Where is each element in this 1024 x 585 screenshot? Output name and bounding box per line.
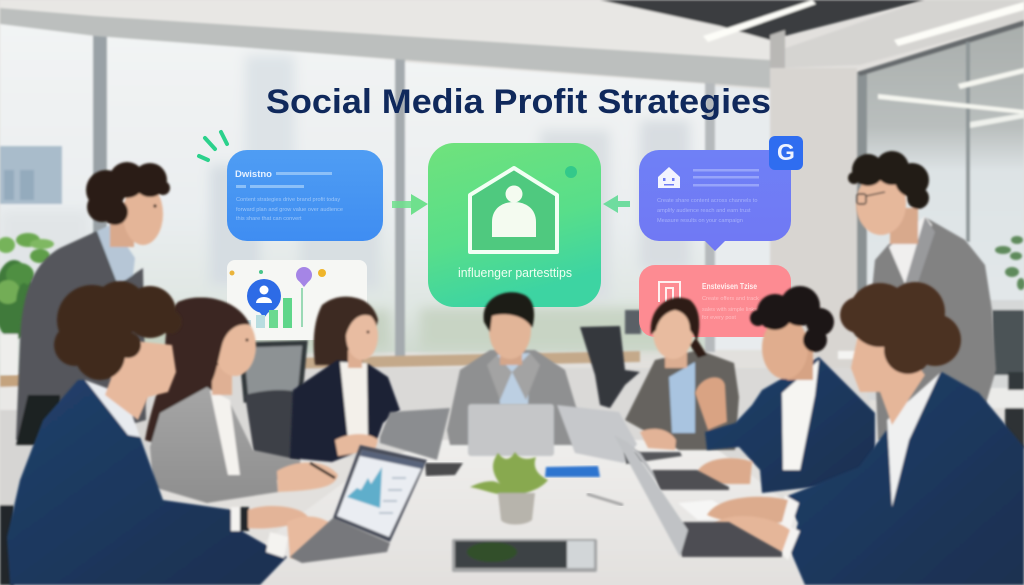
icon: house with person (470, 168, 557, 252)
laptop: silver right of centre (557, 405, 682, 464)
pink panel body text: sales with simple links (702, 307, 757, 313)
laptop: dark grey behind woman (380, 408, 450, 460)
panel: influencer partnerships (428, 143, 601, 307)
laptop: open laptop by curly man (629, 445, 729, 490)
influencer label: influenger partesttips (458, 266, 572, 280)
laptop: centre silver (468, 404, 554, 456)
panel: purple callout (639, 150, 791, 251)
tablet near laptop (425, 463, 463, 476)
bar chart (243, 288, 302, 328)
laptop: front with analytics chart (290, 445, 427, 563)
blue panel body text: forward plan and grow value over audience (236, 207, 343, 213)
blue notebook (545, 466, 600, 477)
arrow: blue panel to green panel (392, 194, 428, 215)
blue panel body text: this share that can convert (236, 216, 302, 222)
icon: purple pin (296, 267, 312, 287)
person: standing man right (848, 151, 996, 440)
icon: chat bubble with person (247, 279, 281, 318)
panel: pink callout (639, 265, 791, 337)
person: curly man in front left (7, 281, 340, 585)
icon: G badge: G (777, 139, 795, 165)
chairs in background (241, 310, 641, 460)
title: Social Media Profit Strategies (266, 83, 771, 121)
person: curly man gesturing (695, 286, 875, 493)
purple panel body text: amplify audience reach and earn trust (657, 208, 751, 214)
panel: analytics card (227, 260, 367, 340)
icon: status dot (565, 166, 577, 178)
person: woman on the right (625, 298, 739, 450)
table (205, 440, 895, 585)
decorative dots (230, 269, 326, 277)
pink panel body text: Create offers and track (702, 296, 759, 302)
person: man in centre (447, 292, 577, 445)
pink panel heading: Enstevisen Tzise (702, 281, 757, 291)
blue panel heading: Dwistno (235, 169, 273, 179)
icon: G badge (769, 136, 803, 170)
arrow: purple panel to green panel (603, 195, 630, 213)
blue panel heading rules (236, 172, 332, 188)
icon: door (659, 282, 680, 302)
sparkle accent (199, 132, 227, 160)
person: woman in dark blazer (290, 297, 400, 462)
paper on table (678, 500, 742, 520)
purple panel body text: Measure results on your campaign (657, 218, 743, 224)
pink panel body text: for every post (702, 315, 736, 321)
icon: small house (658, 167, 680, 188)
person: standing man left (16, 162, 170, 445)
tablet on table (452, 539, 597, 572)
person: woman taking notes (145, 297, 338, 503)
blue panel body text: Content strategies drive brand profit today (236, 197, 340, 203)
plant: centre table plant (470, 452, 548, 524)
purple panel body text: Create share content across channels to (657, 198, 757, 204)
pen on table (587, 494, 623, 505)
purple panel rules (693, 169, 759, 186)
laptop: silver side-on at right (614, 435, 782, 557)
panel: blue callout (227, 150, 383, 241)
plant: left potted plant (0, 233, 54, 375)
person: curly man in front right (707, 282, 1024, 585)
plant: right background plant (995, 236, 1024, 290)
